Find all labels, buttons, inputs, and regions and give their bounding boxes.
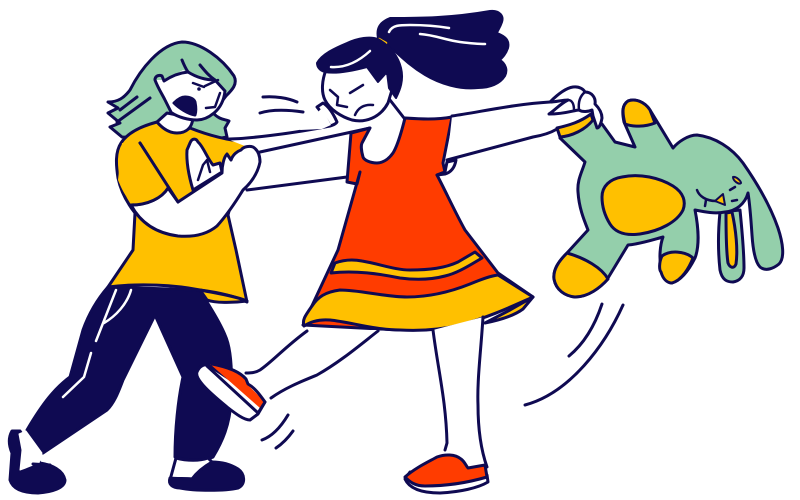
left girl legs: navy trousers — [27, 287, 231, 460]
ponytail — [378, 11, 508, 88]
left girl yellow t-shirt — [108, 122, 247, 302]
rabbit sleeve cuff — [557, 114, 593, 137]
center girl hair — [317, 38, 402, 98]
rabbit face — [697, 190, 716, 206]
center girl orange dress — [303, 117, 533, 330]
rabbit raised foot — [623, 100, 655, 126]
toy rabbit — [554, 100, 783, 297]
dress yellow stripe — [331, 252, 482, 279]
left girl hand on center girl's face — [300, 103, 337, 130]
left girl mouth — [174, 97, 196, 115]
rabbit hanging ear — [718, 210, 744, 282]
rabbit lower right foot — [660, 252, 693, 283]
left girl face — [155, 60, 225, 120]
left girl hair — [108, 42, 235, 142]
motion lines: face shove — [260, 97, 303, 113]
left girl forearm and hands — [118, 139, 260, 236]
center girl rear arm and left girl pushing arm — [227, 125, 370, 190]
left girl left shoe — [9, 431, 65, 493]
center girl neck — [362, 100, 405, 163]
center girl kicking leg — [246, 330, 378, 398]
left girl neck — [157, 113, 193, 133]
center girl front arm — [437, 101, 590, 175]
center girl sneaker — [197, 364, 265, 420]
center girl hand gripping rabbit — [549, 87, 602, 128]
rabbit lower left foot — [554, 253, 608, 297]
left girl right shoe — [169, 458, 244, 490]
rabbit yellow belly — [602, 176, 684, 235]
center girl face — [322, 60, 395, 121]
motion lines: toy rabbit — [525, 304, 623, 405]
dress hem yellow band — [303, 275, 533, 330]
center girl standing leg — [433, 317, 487, 467]
motion lines: kick — [262, 415, 293, 448]
rabbit body and head with upper ear — [554, 100, 783, 297]
center girl slipper — [405, 455, 488, 493]
